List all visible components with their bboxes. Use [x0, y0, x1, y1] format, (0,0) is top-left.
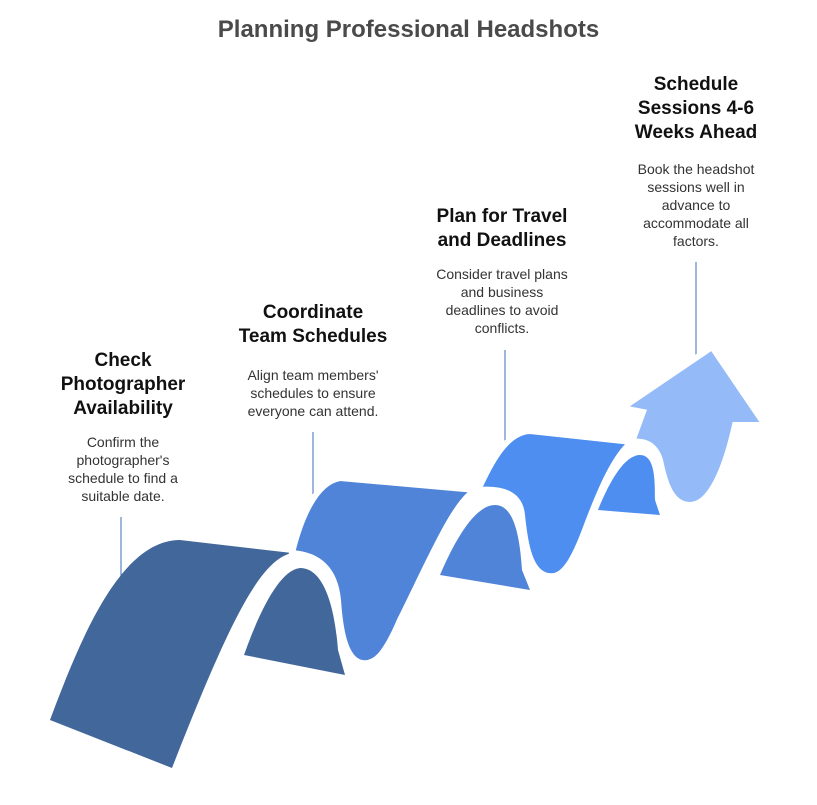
step 3 text: Consider travel plans [436, 266, 568, 282]
step 2 text: Align team members' [247, 367, 379, 383]
step 3 heading: and Deadlines [438, 230, 566, 251]
step 1 text: Confirm the [87, 434, 159, 450]
step 1 text: schedule to find a [68, 470, 178, 486]
step 2 heading: Coordinate [263, 302, 363, 323]
title: Planning Professional Headshots [218, 16, 599, 43]
step 1 heading [61, 350, 185, 419]
segment 1 [50, 540, 345, 768]
step 3 text: conflicts. [475, 320, 529, 336]
step 4 text: Book the headshot [638, 161, 754, 177]
step 1 text: photographer's [77, 452, 169, 468]
segment 2 [292, 478, 530, 663]
step 3 text: and business [461, 284, 543, 300]
step 3 text: deadlines to avoid [446, 302, 558, 318]
step 4 text [638, 161, 754, 249]
step 3 heading: Plan for Travel [437, 206, 567, 227]
step 1 heading: Check [94, 350, 152, 371]
step 1 text [68, 434, 178, 504]
step 1 heading: Availability [73, 398, 173, 419]
step 4 heading [634, 74, 757, 143]
leader lines [121, 262, 696, 590]
step 3 heading [437, 206, 567, 251]
step 2 text [247, 367, 379, 419]
step 2 heading: Team Schedules [239, 326, 387, 347]
step 4 text: sessions well in [647, 179, 745, 195]
step 1 heading: Photographer [61, 374, 185, 395]
arrow head segment [622, 347, 765, 505]
step 3 text [436, 266, 568, 336]
step 4 heading: Weeks Ahead [635, 122, 757, 143]
step 4 text: advance to [662, 197, 730, 213]
segment 3 [478, 431, 660, 576]
step 4 text: factors. [673, 233, 719, 249]
step 4 heading: Schedule [654, 74, 738, 95]
step 2 text: schedules to ensure [250, 385, 376, 401]
step 2 heading [238, 302, 387, 347]
step 2 text: everyone can attend. [248, 403, 378, 419]
step 1 text: suitable date. [81, 488, 165, 504]
step 4 heading: Sessions 4-6 [638, 98, 754, 119]
step 4 text: accommodate all [643, 215, 749, 231]
